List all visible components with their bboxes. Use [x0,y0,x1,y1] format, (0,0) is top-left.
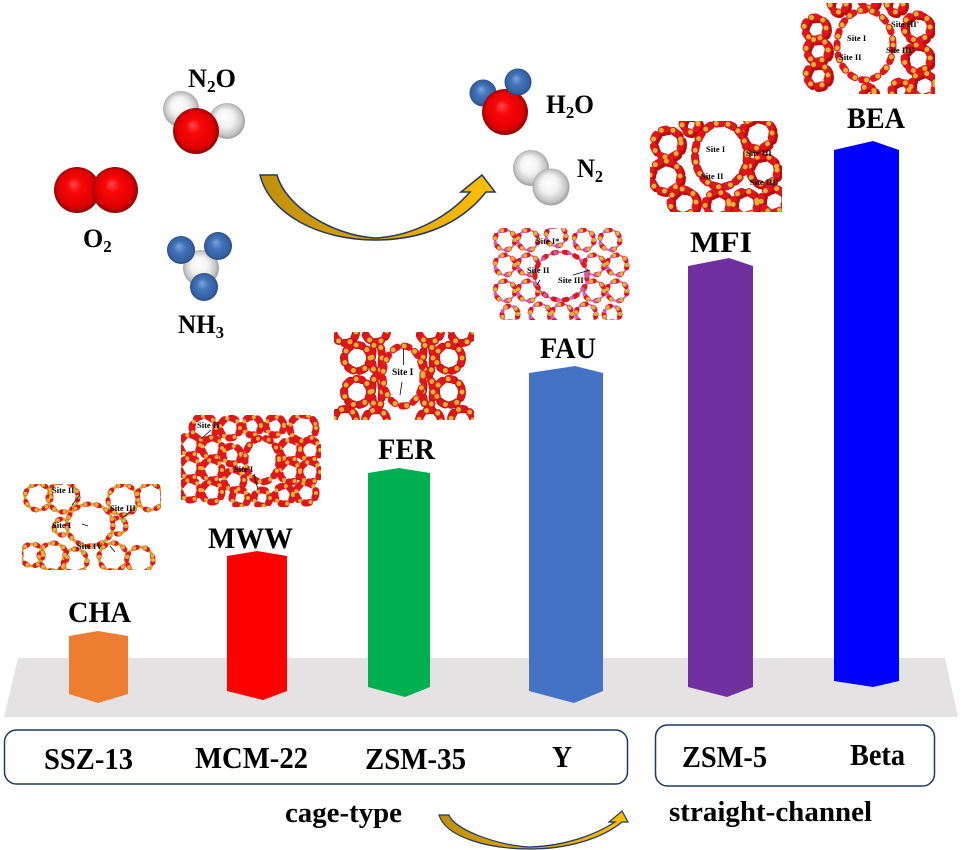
molecule: N2 [513,150,570,206]
label: MFI: MFI [690,226,752,259]
labels: FAU sites [527,236,590,285]
box: cage-type zeolites [4,730,628,784]
label: Beta: Beta [850,737,905,772]
label: FAU: FAU [540,332,596,365]
label: H2O: 2 [566,103,574,122]
label: ZSM-35: ZSM-35 [365,741,466,776]
lattice: FER [334,332,474,420]
label: NH3: NH [178,310,217,339]
labels: BEA sites: Site III' [886,45,914,55]
lattice: MWW [180,415,320,506]
labels: FER site: Site I [392,368,414,378]
molecule: H2O [470,68,532,135]
labels: MFI sites: Site III [746,148,772,158]
label: N2: 2 [595,167,603,186]
labels: MFI sites [701,146,778,185]
label: N2O: N [188,64,207,93]
label: straight-channel: straight-channel [669,796,872,828]
labels: MWW sites: Site I [234,464,254,474]
label: cage-type: cage-type [285,797,402,829]
arrow: cage-type to straight-channel [439,811,628,849]
bar: MFI ZSM-5 [688,258,753,697]
arrow: reaction [260,175,495,240]
molecule: NH3 [167,232,232,301]
labels: BEA sites [839,19,919,62]
label: N2: N [577,154,596,183]
molecule: O2 [54,167,138,213]
labels: CHA sites: Site I [52,520,72,530]
label: MCM-22: MCM-22 [195,740,308,775]
labels: MFI sites: Site II [701,171,724,181]
label: ZSM-5: ZSM-5 [682,739,767,774]
labels: BEA sites: Site III' [891,19,919,29]
box: straight-channel zeolites [656,725,934,786]
label: H2O: O [574,90,594,119]
labels: FAU sites: Site I* [536,236,559,246]
label: BEA: BEA [847,102,905,135]
labels: CHA sites: Site III [110,503,136,513]
labels: BEA sites: Site I [847,33,867,43]
labels: CHA sites: Site IV [77,541,103,551]
lattice: BEA [804,0,937,101]
bar: FAU Y [529,366,603,703]
labels: CHA sites: Site II [52,485,75,495]
label: SSZ-13: SSZ-13 [44,741,133,776]
label: CHA: CHA [68,596,131,629]
label: H2O: H [546,90,566,119]
molecule: N2O [163,91,245,154]
labels: FAU sites: Site II [527,265,550,275]
label: N2O: 2 [207,77,216,96]
bar: BEA Beta [834,141,899,687]
bar: FER ZSM-35 [368,468,430,697]
label: N2O: O [216,64,236,93]
bar: MWW MCM-22 [227,551,287,700]
label: Y: Y [552,739,572,774]
label: O2: O [83,224,103,253]
label: O2: 2 [103,237,112,256]
labels: FAU sites: Site III [558,275,584,285]
lattice: FAU [495,226,627,324]
labels: CHA sites [52,485,136,552]
lattice: MFI [650,121,782,212]
labels: MFI sites: Site III' [750,177,778,187]
labels: MWW sites [197,420,258,490]
labels: BEA sites: Site II [839,52,862,62]
labels: MWW sites: Site II [197,420,220,430]
label: FER: FER [378,433,435,466]
label: NH3: 3 [216,323,224,342]
label: MWW: MWW [208,522,293,555]
bar: CHA SSZ-13 [69,631,128,703]
floor platform [4,658,958,717]
lattice: CHA [21,482,163,573]
labels: MFI sites: Site I [706,144,726,154]
